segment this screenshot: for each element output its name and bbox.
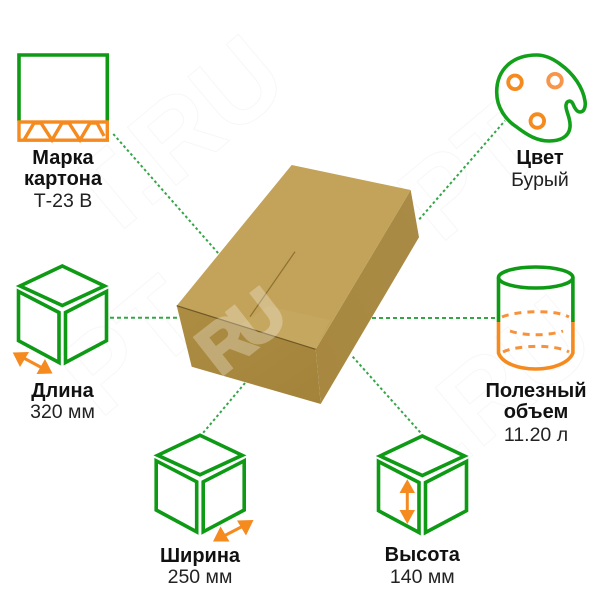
box right face [316,190,419,404]
cube outline [156,435,244,532]
height arrow [400,479,415,524]
palette outline [497,55,585,141]
sheet outline [19,55,107,121]
label: volume [485,380,587,446]
cube outline [378,436,466,532]
watermark: faint outline lettering: T.RU [41,12,308,263]
label: volume: 11.20 л [504,424,568,446]
box left front face [177,306,321,404]
box front edge [177,306,316,349]
label: cardboard grade: Т-23 В [34,190,92,212]
label: color [511,147,569,191]
box front flap [240,306,330,349]
label: width: 250 мм [168,566,232,588]
icon: cardboard grade [19,55,107,140]
paint dot 3 [530,114,544,128]
box flap slit [250,252,295,317]
label: length: Длина [31,380,95,402]
corrugated layer [19,122,107,140]
cube outline [18,266,106,362]
label: cardboard grade: Марка [32,147,95,169]
label: cardboard grade: картона [24,168,103,190]
icon: height cube [378,436,466,532]
cardboard box photo [177,165,419,404]
paint dot 2 [548,74,562,87]
label: volume: объем [504,401,568,423]
cylinder top and upper walls [498,267,573,322]
watermark: faint outline lettering [36,12,600,488]
label: height: Высота [385,544,461,566]
length arrow [13,352,52,374]
icon: palette [497,55,585,141]
label: height: 140 мм [390,566,455,588]
width arrow [213,520,254,542]
label: color: Цвет [516,147,564,169]
label: length [30,380,95,423]
watermark: faint outline lettering: PT [376,79,563,263]
connector lines [110,121,505,434]
icon: width cube [156,435,254,542]
label: length: 320 мм [30,401,95,423]
fill level dashes [502,312,569,352]
paint dot 1 [508,76,522,89]
label: height [385,544,461,588]
box top face [177,165,411,349]
label: width [160,545,241,588]
cylinder lower walls [498,322,573,369]
icon: length cube [13,266,107,374]
label: width: Ширина [160,545,241,567]
icon: volume cylinder [498,267,573,369]
box watermark RU: RU [182,276,297,389]
label: color: Бурый [511,169,569,191]
label: volume: Полезный [485,380,587,402]
watermark: faint outline lettering: PT [36,254,223,438]
label: cardboard grade [24,147,103,212]
